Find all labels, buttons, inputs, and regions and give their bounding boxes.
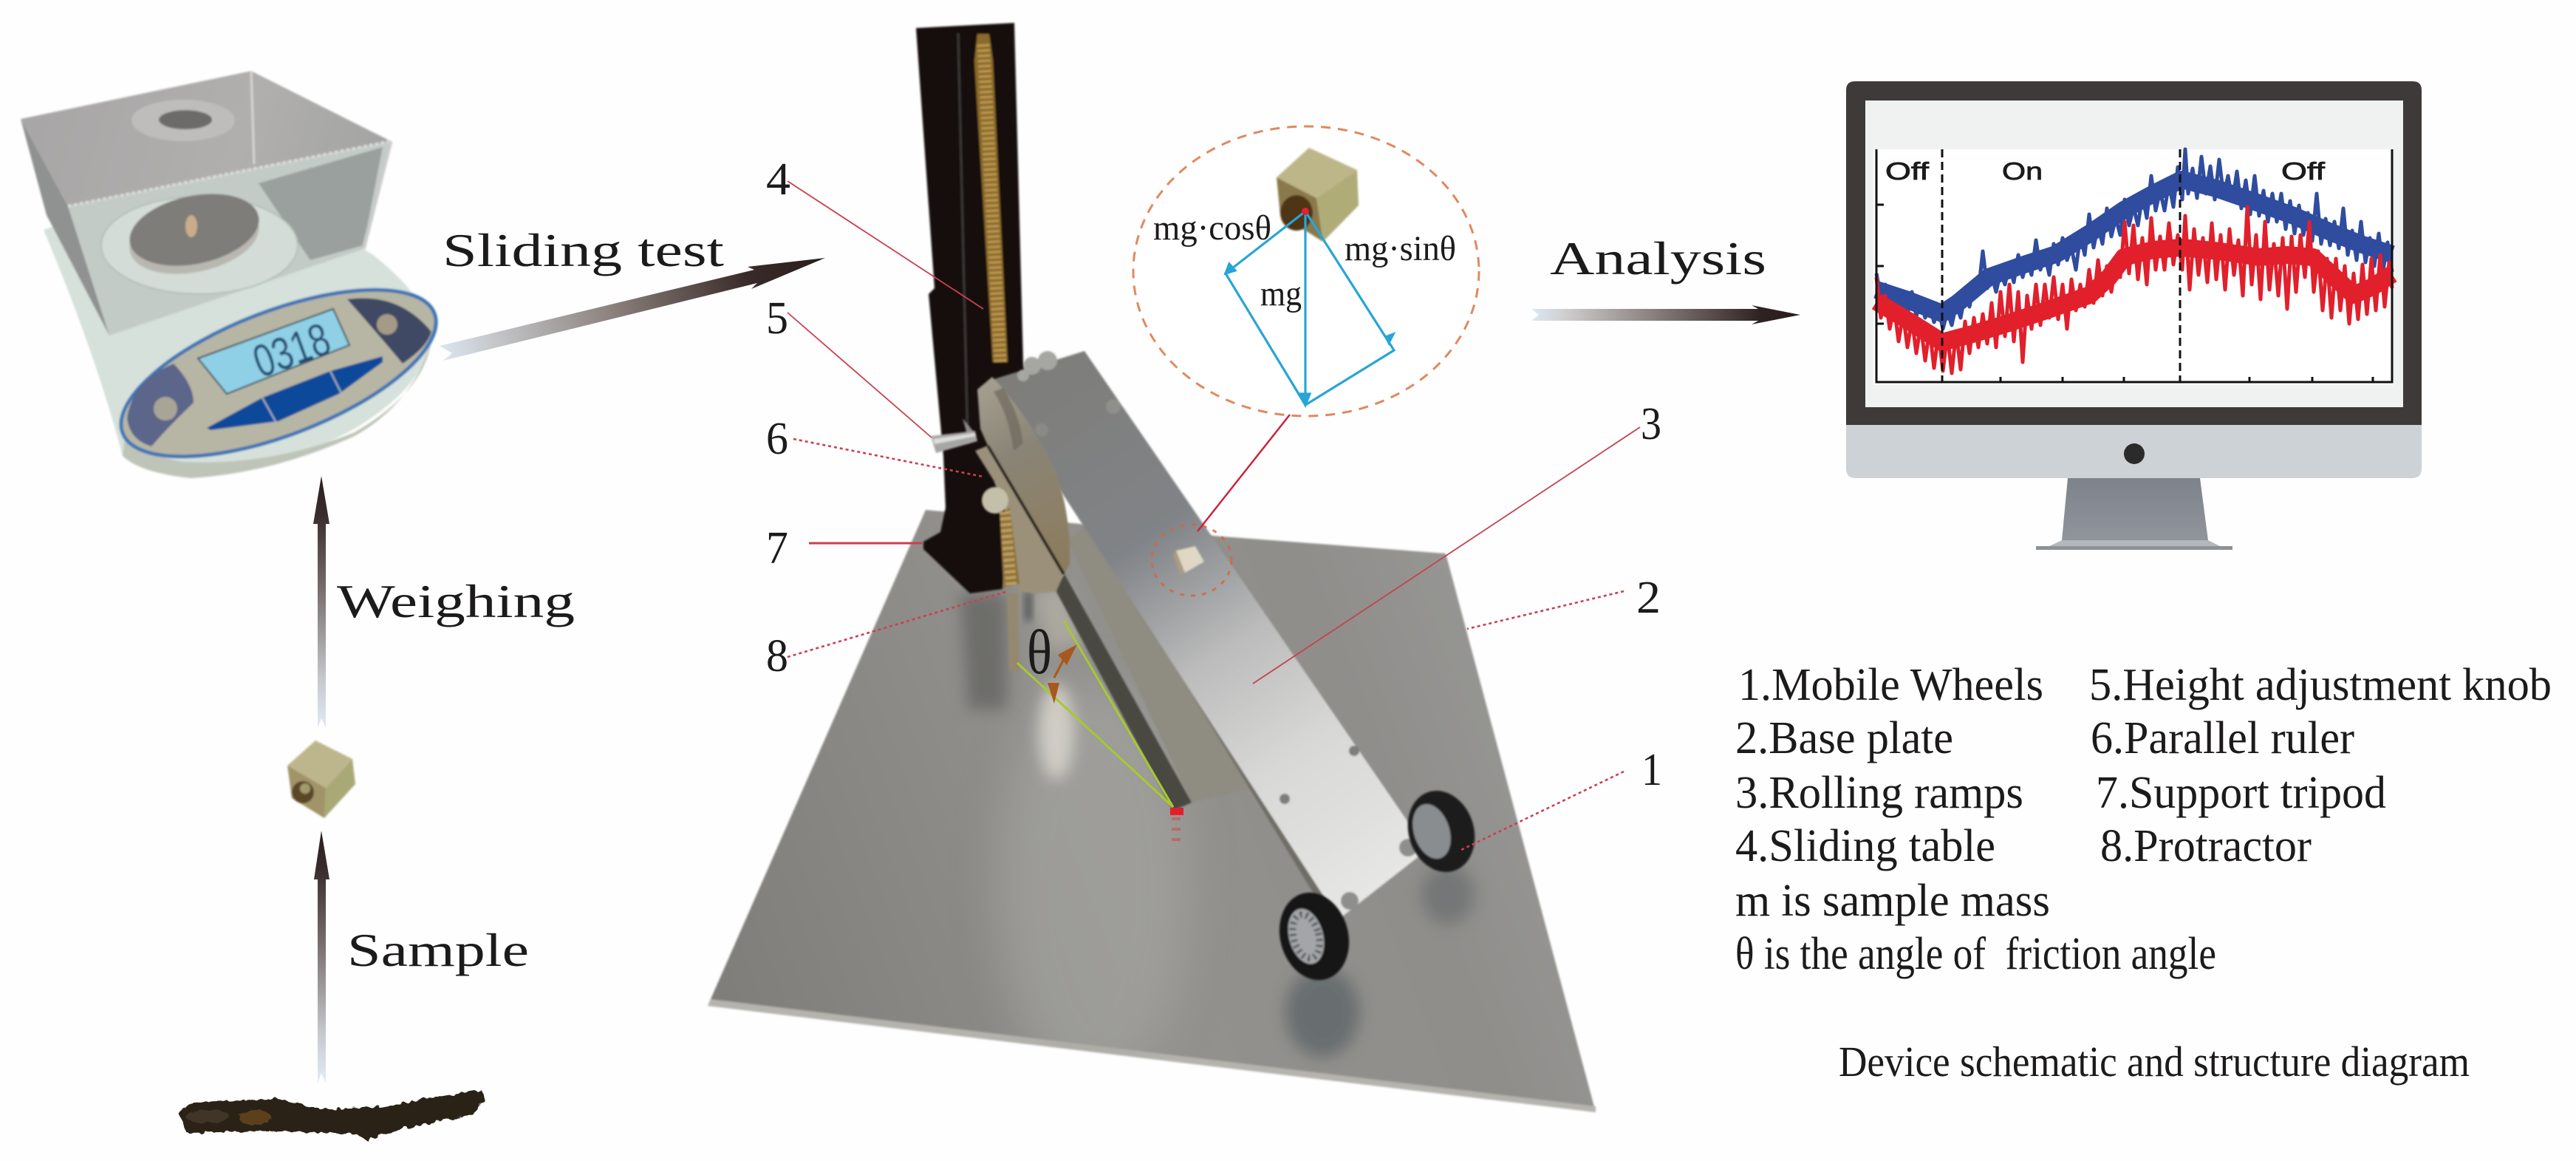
line chart on monitor: [1873, 149, 2393, 385]
legend: parts list: 1.Mobile Wheels: [1738, 660, 2043, 710]
rolling ramp: [989, 351, 1427, 919]
label: mg: mg: [1260, 274, 1302, 313]
label: mg sin theta: mg·sinθ: [1345, 229, 1456, 268]
arrow: analysis: [1531, 305, 1800, 324]
part numbers: 6: [766, 414, 788, 464]
label: weighing: Weighing: [337, 576, 575, 627]
label: analysis: Analysis: [1550, 233, 1766, 285]
legend: parts list: 2.Base plate: [1735, 713, 1953, 763]
label: sliding test: Sliding test: [443, 225, 725, 276]
legend: parts list: [1735, 660, 2552, 979]
photo: test apparatus: [708, 23, 1596, 1112]
photo: analytical balance: [21, 71, 457, 491]
red series: [1876, 207, 2392, 373]
callout: force decomposition: [1133, 126, 1479, 416]
arrow: sliding test: [440, 258, 825, 361]
sliding bar: [1054, 574, 1192, 811]
part numbers: 8: [766, 631, 788, 681]
balance readout: 0318: [247, 313, 337, 388]
legend: parts list: 6.Parallel ruler: [2091, 713, 2354, 763]
part numbers: [766, 154, 1662, 795]
ramp side shade: [1182, 678, 1339, 919]
state labels: [1885, 157, 2326, 185]
photo: raw branch sample: [179, 1089, 485, 1141]
blue series: [1876, 149, 2392, 329]
monitor: [1846, 81, 2422, 550]
arrow: weighing: [313, 476, 329, 728]
callout sample cube: [1277, 148, 1359, 242]
protractor disc: [975, 377, 1070, 593]
label: sample: Sample: [347, 925, 529, 976]
base plate: [708, 510, 1596, 1112]
sliding column: [916, 23, 1031, 593]
legend: parts list: 7.Support tripod: [2096, 768, 2386, 818]
protractor bolt: [982, 487, 1008, 514]
legend: parts list: 8.Protractor: [2100, 821, 2312, 871]
part numbers: 2: [1636, 573, 1661, 623]
legend: parts list: m is sample mass: [1735, 876, 2050, 926]
height adjustment knob: [931, 418, 977, 453]
part numbers: 3: [1641, 399, 1661, 449]
part numbers: 4: [766, 154, 790, 205]
theta symbol: θ: [1027, 616, 1052, 687]
protractor rack: [1000, 508, 1019, 588]
leader lines: [788, 181, 1640, 850]
state labels: On: [2002, 157, 2043, 185]
small sample on ramp: [1173, 546, 1204, 575]
small dashed circle around sample: [1152, 525, 1231, 596]
angle arrows: [1048, 644, 1077, 704]
part numbers: 7: [766, 523, 788, 573]
friction angle indicator: [1017, 616, 1183, 844]
state labels: Off: [2281, 157, 2326, 185]
force vectors: [1226, 211, 1394, 405]
arrow: sample: [314, 831, 329, 1083]
ramp side face: [1067, 527, 1256, 803]
legend: parts list: 4.Sliding table: [1735, 821, 1995, 871]
axes and ticks: [1876, 149, 2392, 382]
caption: Device schematic and structure diagram: [1839, 1038, 2470, 1086]
state labels: Off: [1885, 157, 1930, 185]
mobile wheels: [1270, 782, 1485, 988]
part numbers: 5: [766, 293, 788, 344]
legend: parts list: 3.Rolling ramps: [1735, 768, 2023, 818]
part numbers: 1: [1641, 745, 1662, 795]
callout connector line: [1198, 415, 1290, 531]
legend: parts list: θ is the angle of friction angle: [1735, 929, 2216, 979]
label: mg cos theta: mg·cosθ: [1153, 208, 1271, 248]
photo: sample cube: [287, 740, 355, 818]
balance display panel: [100, 256, 457, 491]
legend: parts list: 5.Height adjustment knob: [2089, 660, 2552, 710]
